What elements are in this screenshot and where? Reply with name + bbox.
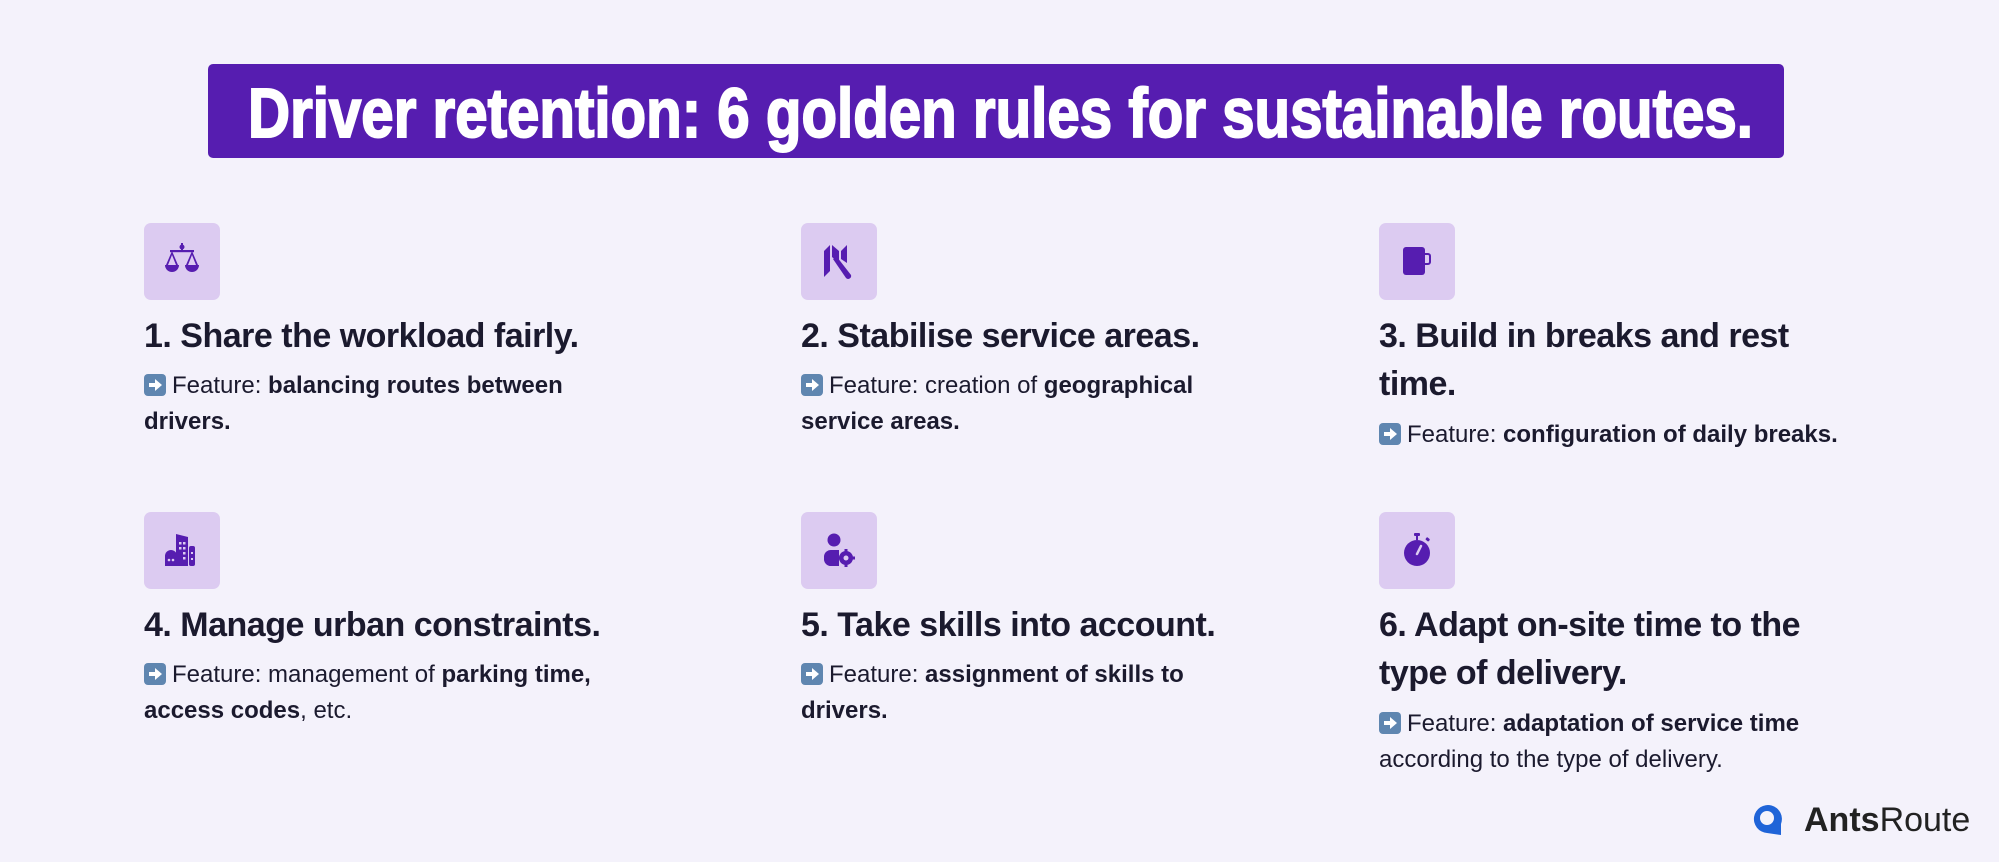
feature 4: access codes, etc. [144,697,352,724]
heading 6 [1379,606,1800,692]
feature 2: service areas. [801,408,960,435]
feature 6: Feature: adaptation of service time [1407,710,1799,737]
feature 2 [801,372,1193,435]
heading 3 [1379,317,1789,403]
heading 1: 1. Share the workload fairly. [144,317,579,355]
icon: map [801,223,877,300]
feature 6: according to the type of delivery. [1379,746,1723,773]
feature 3: Feature: configuration of daily breaks. [1407,421,1838,448]
heading 6: 6. Adapt on-site time to the [1379,606,1800,644]
feature 4: Feature: management of parking time, [172,661,591,688]
icon: scales [144,223,220,300]
feature 4 [144,661,591,724]
icon: stopwatch [1379,512,1455,589]
icon: buildings [144,512,220,589]
heading 5: 5. Take skills into account. [801,606,1215,644]
feature 5: drivers. [801,697,888,724]
heading 6: type of delivery. [1379,654,1627,692]
heading 3: time. [1379,365,1456,403]
heading 3: 3. Build in breaks and rest [1379,317,1789,355]
icon: user gear [801,512,877,589]
feature 5 [801,661,1184,724]
feature 5: Feature: assignment of skills to [829,661,1184,688]
feature 1: drivers. [144,408,231,435]
logo: AntsRoute [1804,801,1970,839]
icon: mug [1379,223,1455,300]
heading 2: 2. Stabilise service areas. [801,317,1200,355]
feature 1: Feature: balancing routes between [172,372,563,399]
feature 2: Feature: creation of geographical [829,372,1193,399]
heading 4: 4. Manage urban constraints. [144,606,600,644]
feature 1 [144,372,563,435]
feature 6 [1379,710,1799,773]
